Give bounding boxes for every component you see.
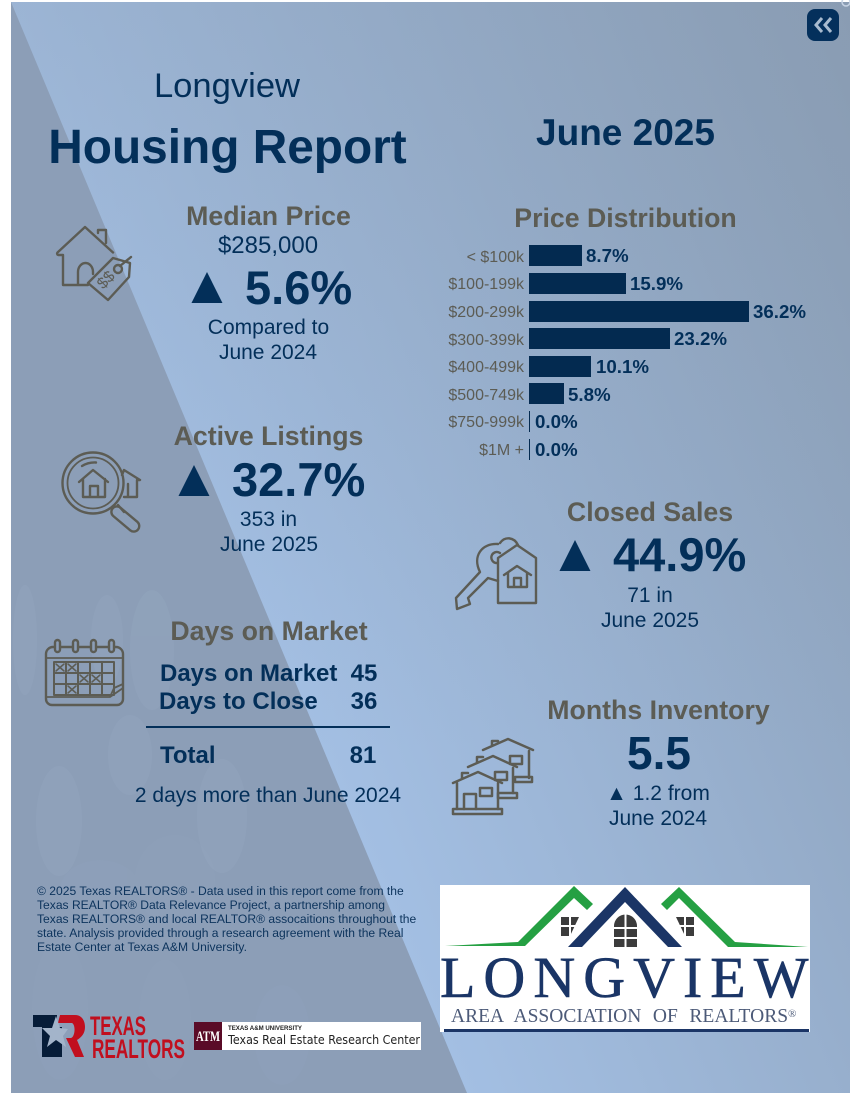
logo: Texas Realtors bbox=[33, 1011, 185, 1064]
icon: row of houses bbox=[453, 739, 533, 814]
copyright text block: state. Analysis provided through a research agreement with the Real bbox=[37, 926, 403, 940]
change percentage: 44.9% bbox=[613, 528, 746, 581]
logo: Texas Realtors: TEXAS bbox=[90, 1011, 146, 1041]
title bbox=[48, 67, 407, 174]
report date: June 2025 bbox=[536, 112, 715, 153]
heading: Months Inventory bbox=[547, 695, 770, 725]
change note bbox=[606, 782, 710, 830]
heading: Price Distribution bbox=[514, 203, 737, 233]
change percentage: 5.6% bbox=[245, 261, 352, 314]
logo: Longview Area Association of Realtors: ® bbox=[788, 1008, 796, 1020]
copyright text block: Texas REALTORS® and local REALTOR® assocaitions throughout the bbox=[37, 912, 417, 926]
icon: house with price tag: $$ bbox=[94, 268, 119, 293]
heading: Days on Market bbox=[170, 616, 368, 646]
comparison note: Compared to bbox=[208, 316, 329, 339]
days table: 81 bbox=[350, 742, 376, 769]
median price value: $285,000 bbox=[218, 232, 318, 259]
change note: ▲ 1.2 from bbox=[606, 782, 710, 805]
copyright text block: Estate Center at Texas A&M University. bbox=[37, 940, 247, 954]
panel: price distribution bbox=[448, 203, 806, 460]
heading: Closed Sales bbox=[567, 497, 733, 527]
panel: median price bbox=[57, 201, 352, 364]
bar chart: < $100k bbox=[467, 249, 525, 266]
change percentage: 32.7% bbox=[232, 453, 365, 506]
listing count note bbox=[220, 508, 318, 556]
comparison note bbox=[208, 316, 329, 364]
days table: 36 bbox=[351, 688, 377, 715]
bar chart: 0.0% bbox=[535, 411, 578, 432]
logo: Texas Real Estate Research Center: Texas Real Estate Research Center bbox=[227, 1033, 420, 1047]
logo: Longview Area Association of Realtors bbox=[440, 885, 816, 1032]
bar chart: 10.1% bbox=[596, 356, 649, 377]
bar chart: $750-999k bbox=[448, 414, 525, 431]
panel: closed sales bbox=[456, 497, 746, 632]
bar chart: 5.8% bbox=[568, 384, 611, 405]
days table: Total bbox=[160, 742, 216, 769]
days table bbox=[146, 660, 390, 769]
icon: magnifier over houses bbox=[62, 452, 141, 534]
days table: Days on Market bbox=[160, 660, 337, 687]
logo: Longview Area Association of Realtors: LONGVIEW bbox=[440, 945, 816, 1010]
logo: Texas Real Estate Research Center: TEXAS A&M UNIVERSITY bbox=[228, 1026, 302, 1032]
logo: Longview Area Association of Realtors: AREA ASSOCIATION OF REALTORS bbox=[451, 1006, 788, 1027]
sales count note: June 2025 bbox=[601, 609, 699, 632]
title: Longview bbox=[154, 67, 301, 105]
bar chart: $1M + bbox=[479, 442, 524, 459]
change percentage: ▲ bbox=[181, 256, 233, 315]
listing count note: June 2025 bbox=[220, 533, 318, 556]
back button bbox=[807, 0, 850, 41]
change percentage: ▲ bbox=[549, 524, 601, 583]
logo: Texas Real Estate Research Center: ATM bbox=[196, 1029, 220, 1045]
icon: key with house tag bbox=[456, 538, 536, 609]
listing count note: 353 in bbox=[240, 508, 297, 531]
logo: Texas Realtors: REALTORS bbox=[92, 1034, 185, 1064]
bar chart: 23.2% bbox=[674, 328, 727, 349]
title: Housing Report bbox=[48, 121, 407, 174]
icon: roofs bbox=[445, 886, 808, 947]
comparison note: June 2024 bbox=[219, 341, 317, 364]
heading: Median Price bbox=[186, 201, 351, 231]
change percentage bbox=[168, 449, 365, 508]
icon: house with price tag bbox=[57, 227, 131, 300]
days table: Days to Close bbox=[159, 688, 318, 715]
bar chart: 36.2% bbox=[753, 301, 806, 322]
panel: days on market bbox=[46, 616, 401, 807]
change percentage bbox=[549, 524, 746, 583]
comparison note: 2 days more than June 2024 bbox=[135, 784, 401, 807]
change percentage: ▲ bbox=[168, 449, 220, 508]
bar chart: $400-499k bbox=[448, 359, 525, 376]
bar chart bbox=[448, 245, 806, 460]
bar chart: $500-749k bbox=[448, 387, 525, 404]
icon: calendar bbox=[46, 640, 123, 705]
logo: Texas Real Estate Research Center bbox=[194, 1022, 421, 1050]
days table: 45 bbox=[351, 660, 377, 687]
change note: June 2024 bbox=[609, 807, 707, 830]
bar chart: $300-399k bbox=[448, 332, 525, 349]
inventory value: 5.5 bbox=[627, 727, 691, 779]
copyright text block: Texas REALTOR® Data Relevance Project, a partnership among bbox=[37, 898, 385, 912]
bar chart: $200-299k bbox=[448, 304, 525, 321]
sales count note bbox=[601, 584, 699, 632]
panel: months inventory bbox=[453, 695, 770, 830]
panel: active listings bbox=[62, 421, 365, 556]
bar chart: 8.7% bbox=[586, 245, 629, 266]
bar chart: 15.9% bbox=[630, 273, 683, 294]
copyright text block bbox=[37, 884, 417, 954]
sales count note: 71 in bbox=[627, 584, 673, 607]
bar chart: 0.0% bbox=[535, 439, 578, 460]
change percentage bbox=[181, 256, 352, 315]
bar chart: $100-199k bbox=[448, 276, 525, 293]
copyright text block: © 2025 Texas REALTORS® - Data used in this report come from the bbox=[37, 884, 404, 898]
heading: Active Listings bbox=[174, 421, 363, 451]
